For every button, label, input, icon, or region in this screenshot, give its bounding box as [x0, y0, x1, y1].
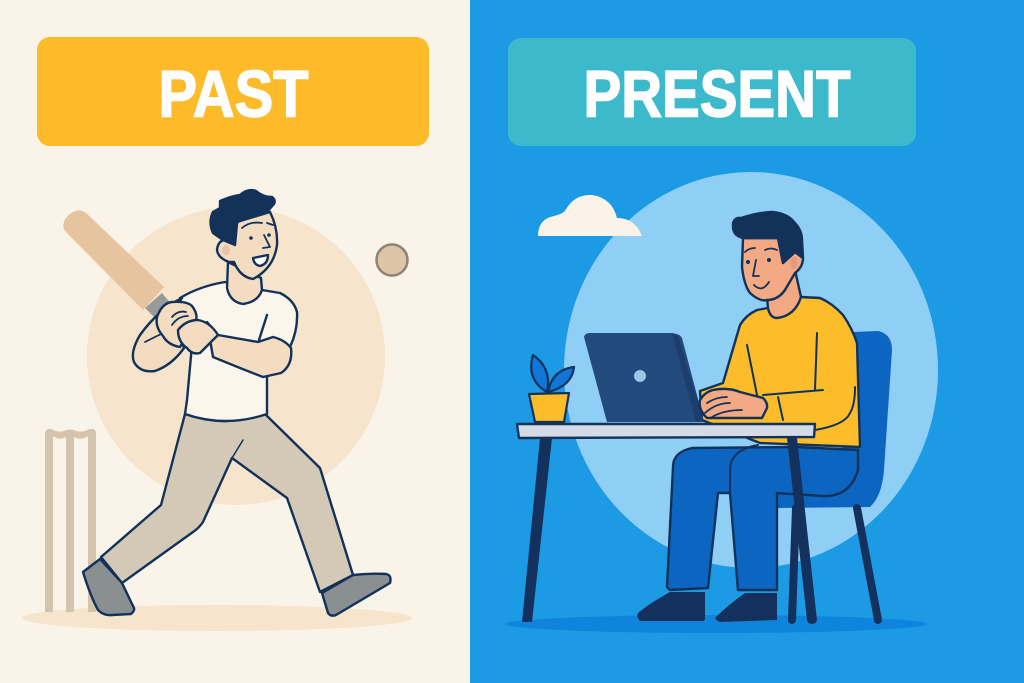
figure: cricket batter [63, 190, 390, 616]
panel: present [470, 0, 1024, 683]
torso [700, 297, 860, 447]
hair [733, 212, 803, 263]
heading: present: PRESENT [584, 56, 850, 130]
eyes and brows [746, 260, 750, 264]
neck [767, 270, 801, 318]
sleeve fold [259, 315, 267, 340]
heading: past: PAST [158, 56, 308, 130]
figure: person at laptop [517, 212, 860, 624]
hair [210, 190, 275, 245]
ground shadow: present [506, 615, 926, 633]
heading: past [37, 37, 429, 146]
front arm [207, 322, 291, 377]
smile [253, 255, 268, 266]
head [217, 212, 277, 279]
laptop [584, 333, 704, 422]
background circle: past [87, 207, 385, 505]
trousers [667, 447, 858, 590]
back arm [133, 298, 184, 371]
icon: potted plant [529, 355, 574, 422]
ground shadow: past [22, 605, 412, 631]
table legs [522, 438, 552, 622]
top hand [157, 302, 196, 347]
front shoe [322, 574, 390, 616]
chair [777, 331, 892, 620]
torso [180, 282, 297, 421]
hand [700, 389, 767, 418]
shoes [637, 592, 705, 621]
heading: present [508, 38, 916, 146]
icon: cricket wicket [45, 429, 96, 612]
bat [63, 210, 214, 361]
trousers [101, 414, 353, 592]
ear blush [222, 245, 230, 255]
panel: past [0, 0, 470, 683]
neck [227, 262, 262, 304]
icon: cricket ball [376, 244, 408, 276]
back shoe [83, 559, 134, 615]
head [742, 238, 803, 300]
background circle: present [564, 172, 938, 568]
eyes and brows [249, 236, 253, 240]
icon: cloud [538, 195, 642, 236]
bottom hand [178, 320, 218, 353]
table top [517, 424, 815, 438]
ear blush [790, 257, 798, 269]
sweater folds [747, 333, 855, 430]
